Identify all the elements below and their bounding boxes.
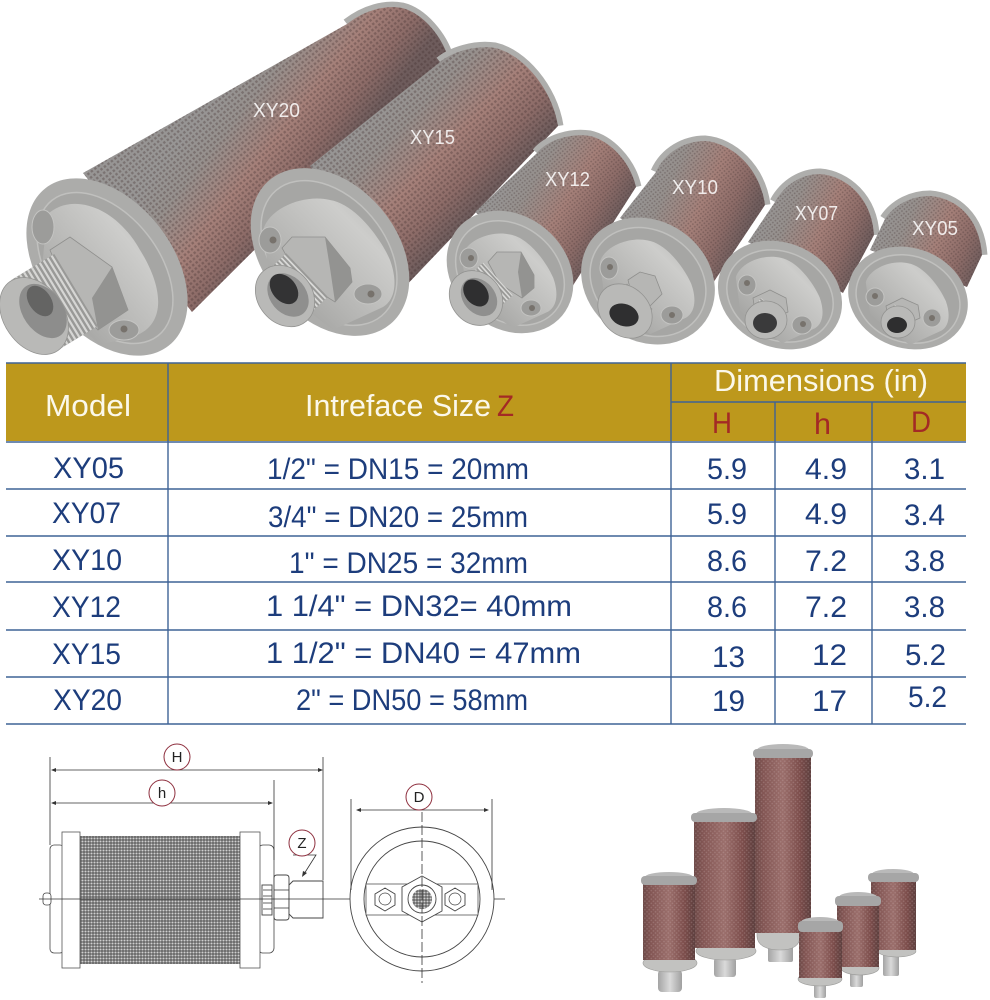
model labels on silencers: XY20 (253, 100, 300, 122)
header labels: D (911, 406, 931, 439)
silencer large (691, 808, 757, 977)
row XY10: 1" = DN25 = 32mm (289, 547, 528, 580)
row XY20 (53, 681, 947, 718)
header labels: h (814, 408, 831, 441)
dimension h (51, 780, 274, 860)
dimension H (50, 744, 323, 880)
panel: product photo of six silencers (0, 7, 982, 386)
dimension D (351, 784, 492, 890)
row XY10: 7.2 (805, 545, 847, 578)
silencer right tall (868, 869, 919, 976)
row XY12: 3.8 (904, 591, 945, 624)
row XY10: XY10 (52, 544, 122, 577)
dimension Z callout: Z (297, 835, 307, 852)
row XY20: XY20 (53, 684, 122, 717)
silencer XY10 (556, 141, 765, 370)
row XY07: 4.9 (805, 498, 847, 531)
row XY07 (52, 497, 945, 534)
dimensions table (6, 363, 966, 724)
row XY15: 13 (712, 641, 745, 674)
model labels on silencers: XY05 (912, 218, 958, 240)
row XY12: XY12 (52, 591, 121, 624)
table header band (6, 363, 966, 441)
row XY20: 2" = DN50 = 58mm (296, 684, 528, 717)
silencer medium left (641, 872, 697, 992)
row XY05: 1/2" = DN15 = 20mm (267, 453, 529, 486)
model labels on silencers: XY07 (795, 203, 838, 225)
dimension D: D (414, 789, 425, 806)
row XY15: XY15 (52, 638, 121, 671)
row XY05: 4.9 (805, 453, 847, 486)
side view of silencer (39, 832, 505, 968)
silencer XY20 (0, 7, 448, 386)
header labels: H (712, 407, 732, 440)
model labels on silencers: XY12 (545, 169, 590, 191)
silencer XY12 (422, 135, 636, 359)
row XY20: 5.2 (908, 681, 947, 714)
silencer XY05 (834, 196, 982, 366)
row XY15: 12 (812, 639, 847, 672)
row XY15: 5.2 (905, 639, 946, 672)
row XY07: 3.4 (904, 499, 945, 532)
row XY12: 8.6 (707, 591, 747, 624)
header labels: Intreface Size (305, 388, 491, 423)
header labels: Dimensions (in) (714, 363, 928, 398)
row XY05 (53, 452, 945, 486)
row XY20: 17 (812, 685, 847, 718)
model labels on silencers: XY15 (410, 127, 455, 149)
row XY12 (52, 590, 945, 624)
model labels on silencers (253, 100, 958, 240)
header labels: Z (497, 390, 514, 423)
row XY15 (52, 637, 946, 674)
row XY10: 3.8 (904, 545, 945, 578)
row XY05: XY05 (53, 452, 124, 485)
dimension h: h (158, 785, 166, 802)
silencer XY15 (218, 47, 558, 367)
row XY07: XY07 (52, 497, 121, 530)
dimension H: H (172, 749, 182, 766)
header labels: Model (45, 388, 131, 423)
silencer right medium (835, 892, 881, 987)
model labels on silencers: XY10 (672, 177, 718, 199)
row XY07: 5.9 (707, 498, 747, 531)
silencer small front (798, 917, 843, 998)
row XY07: 3/4" = DN20 = 25mm (268, 501, 528, 534)
row XY20: 19 (712, 685, 745, 718)
row XY10 (52, 544, 945, 580)
row XY05: 5.9 (707, 453, 747, 486)
row XY05: 3.1 (904, 453, 945, 486)
silencer XY07 (700, 174, 874, 369)
dimension Z callout (289, 830, 316, 877)
row XY15: 1 1/2" = DN40 = 47mm (266, 637, 581, 670)
header labels (45, 363, 931, 441)
end view of silencer (350, 812, 494, 983)
technical drawing (39, 744, 505, 983)
silencer tall (753, 744, 813, 962)
row XY10: 8.6 (707, 545, 747, 578)
photo: group of six upright silencers (641, 744, 919, 998)
row XY12: 1 1/4" = DN32= 40mm (266, 590, 572, 623)
row XY12: 7.2 (805, 591, 847, 624)
